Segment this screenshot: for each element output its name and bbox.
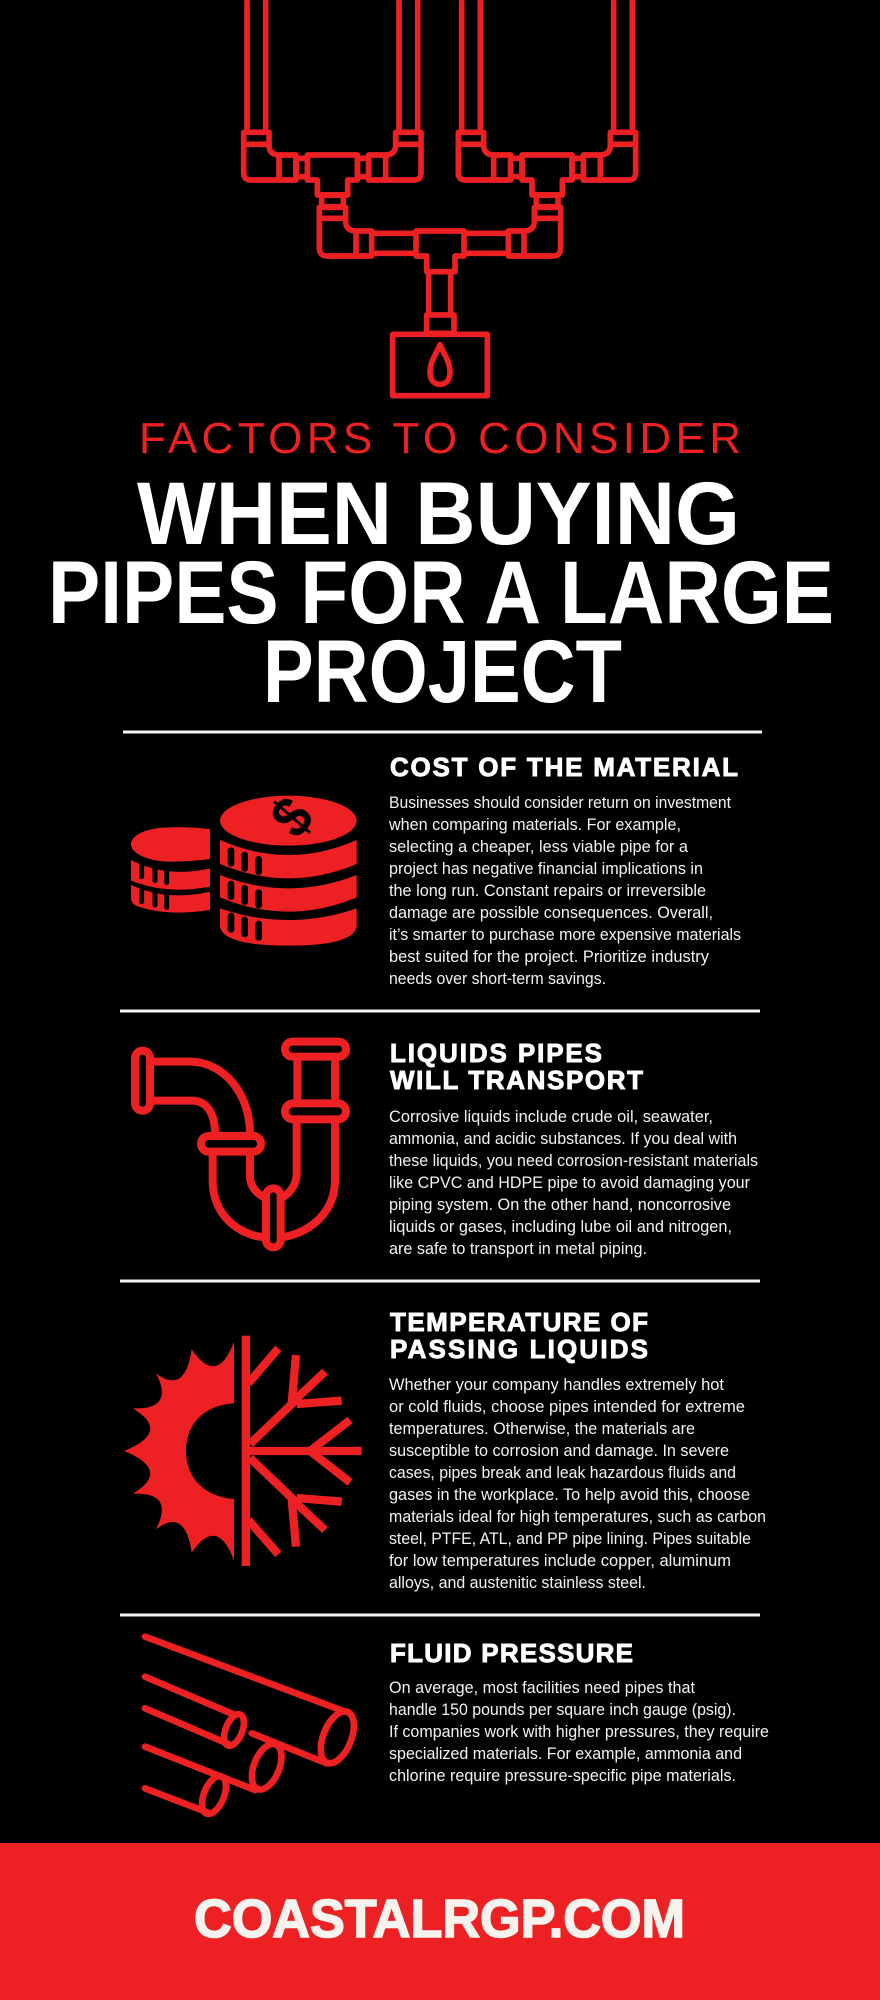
icon: coin stacks	[131, 785, 357, 946]
body text: alloys, and austenitic stainless steel.	[389, 1574, 646, 1592]
body text: damage are possible consequences. Overall,	[389, 904, 713, 922]
body text: the long run. Constant repairs or irreversible	[389, 882, 706, 900]
body text: for low temperatures include copper, aluminum	[389, 1552, 731, 1570]
body text	[388, 794, 741, 988]
body text: when comparing materials. For example,	[388, 816, 681, 834]
body text: Whether your company handles extremely hot	[389, 1376, 724, 1394]
heading: LIQUIDS PIPES	[390, 1038, 602, 1068]
icon: coin stacks: $	[257, 785, 326, 849]
body text: specialized materials. For example, ammonia and	[389, 1745, 742, 1763]
body text: If companies work with higher pressures, they require	[389, 1723, 769, 1741]
panel: liquids pipes will transport	[135, 1038, 758, 1258]
heading line 1: WHEN BUYING	[137, 463, 740, 563]
body text: like CPVC and HDPE pipe to avoid damaging your	[389, 1174, 750, 1192]
body text: temperatures. Otherwise, the materials are	[389, 1420, 695, 1438]
body text: needs over short-term savings.	[389, 970, 606, 988]
body text: these liquids, you need corrosion-resistant materials	[389, 1152, 758, 1170]
heading line 3: PROJECT	[263, 621, 622, 721]
body text: gases in the workplace. To help avoid this, choose	[389, 1486, 750, 1504]
panel: fluid pressure	[145, 1637, 769, 1817]
heading: TEMPERATURE OF	[390, 1307, 648, 1337]
footer band	[0, 1843, 880, 2000]
body text: best suited for the project. Prioritize industry	[389, 948, 710, 966]
body text: it’s smarter to purchase more expensive materials	[389, 926, 741, 944]
footer website: COASTALRGP.COM	[194, 1889, 685, 1949]
body text: are safe to transport in metal piping.	[389, 1240, 647, 1258]
body text: handle 150 pounds per square inch gauge (psig).	[389, 1701, 736, 1719]
title	[48, 414, 834, 721]
body text: or cold fluids, choose pipes intended for extreme	[389, 1398, 745, 1416]
body text	[389, 1108, 758, 1258]
body text: liquids or gases, including lube oil and nitrogen,	[389, 1218, 732, 1236]
body text: Businesses should consider return on investment	[389, 794, 731, 812]
heading: WILL TRANSPORT	[390, 1065, 643, 1095]
icon: bundle of pipes	[145, 1637, 361, 1817]
heading: FLUID PRESSURE	[390, 1638, 633, 1668]
panel: cost of the material	[131, 752, 741, 988]
icon: half sun half snowflake	[124, 1336, 362, 1566]
panel: temperature of passing liquids	[124, 1307, 766, 1592]
body text: cases, pipes break and leak hazardous fluids and	[389, 1464, 736, 1482]
body text: selecting a cheaper, less viable pipe for a	[389, 838, 689, 856]
subtitle: factors to consider: FACTORS TO CONSIDER	[139, 414, 741, 463]
body text: ammonia, and acidic substances. If you deal with	[389, 1130, 737, 1148]
body text: piping system. On the other hand, noncorrosive	[389, 1196, 731, 1214]
body text: On average, most facilities need pipes that	[389, 1679, 695, 1697]
body text	[389, 1376, 766, 1592]
body text: materials ideal for high temperatures, such as carbon	[389, 1508, 766, 1526]
icon: pipe network with tank and drop	[244, 2, 636, 396]
heading: PASSING LIQUIDS	[390, 1334, 648, 1364]
body text: Corrosive liquids include crude oil, seawater,	[389, 1108, 713, 1126]
heading	[390, 1307, 648, 1364]
body text: steel, PTFE, ATL, and PP pipe lining. Pipes suitable	[389, 1530, 751, 1548]
body text: project has negative financial implications in	[389, 860, 703, 878]
body text	[389, 1679, 769, 1785]
icon: P-trap pipe	[135, 1042, 346, 1247]
heading: COST OF THE MATERIAL	[390, 752, 738, 782]
body text: susceptible to corrosion and damage. In severe	[389, 1442, 729, 1460]
body text: chlorine require pressure-specific pipe materials.	[389, 1767, 736, 1785]
heading	[390, 1038, 643, 1095]
